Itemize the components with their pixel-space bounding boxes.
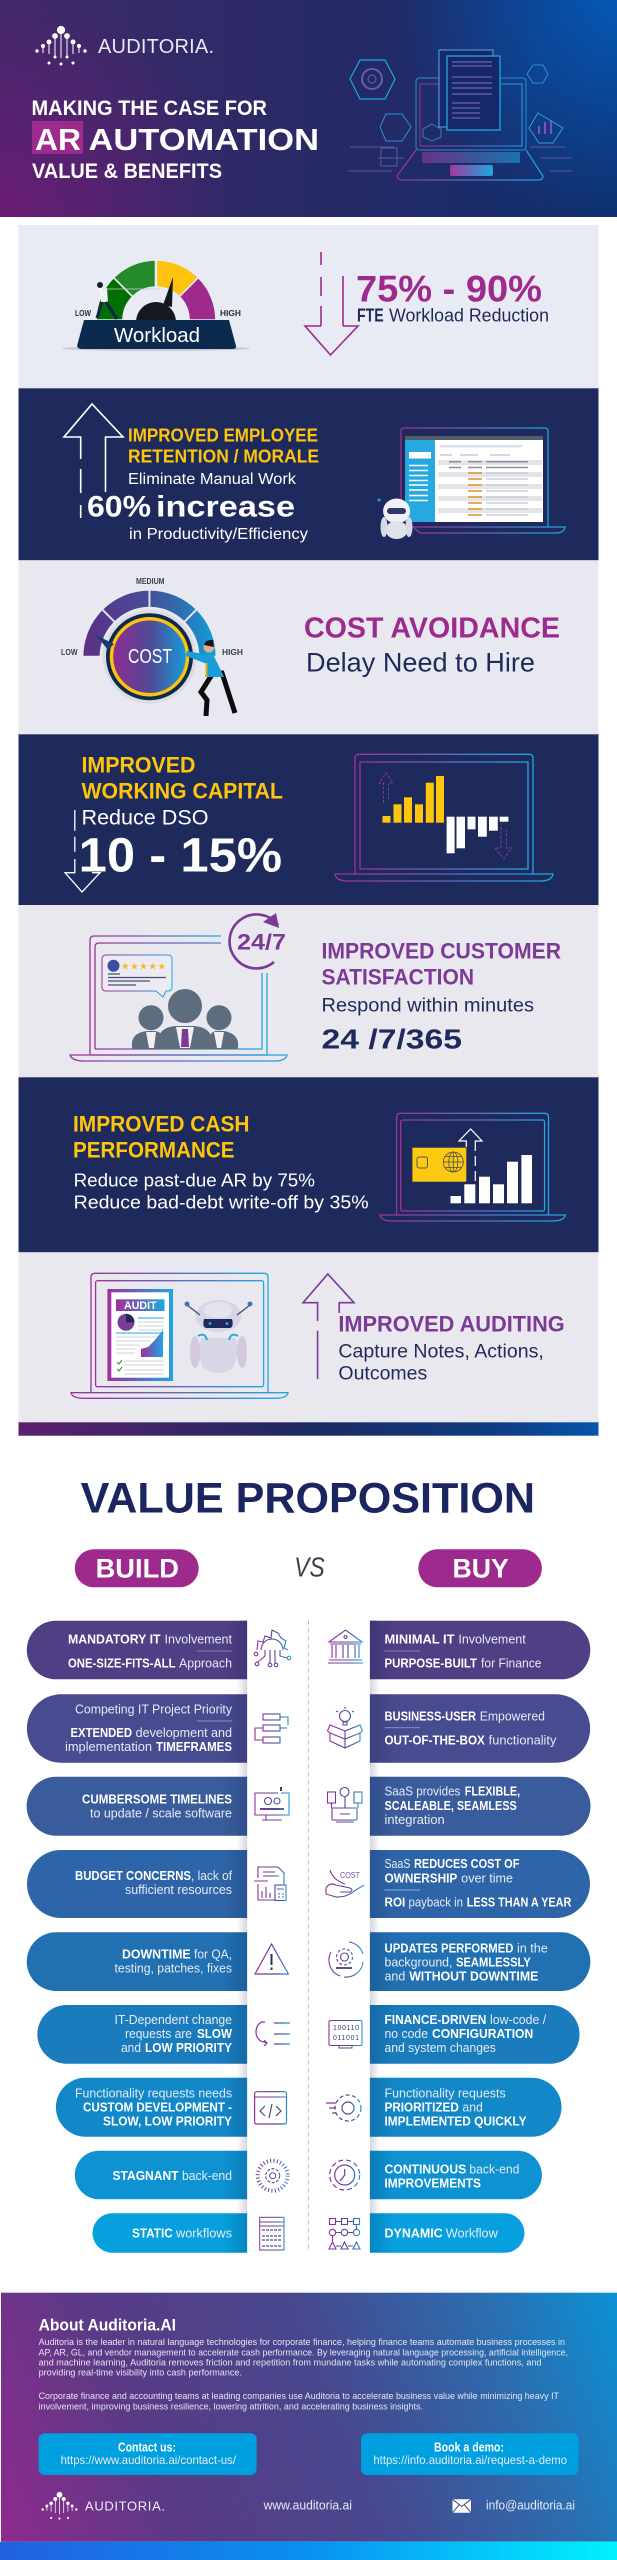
text block: cash performance: PERFORMANCE — [73, 1138, 234, 1163]
gauge: workload: LOW — [75, 309, 91, 318]
icon: hand with cost — [326, 1870, 364, 1897]
text block: retention: increase — [156, 491, 295, 524]
gauge: cost: HIGH — [222, 648, 243, 657]
text block: auditing: Outcomes — [338, 1363, 427, 1384]
row 4: buy: ROI — [384, 1895, 405, 1909]
row 6: build: SLOW — [197, 2027, 232, 2041]
row 4: build: , lack of — [191, 1869, 232, 1883]
metric: 75% - 90% — [356, 268, 549, 326]
row 7: buy: Functionality requests — [384, 2086, 506, 2100]
panel: working capital — [18, 734, 598, 905]
text block: retention — [87, 426, 319, 543]
text block: cost avoidance: Delay Need to Hire — [306, 648, 535, 678]
row 7: buy: PRIORITIZED — [384, 2100, 459, 2114]
gauge: workload: Workload — [114, 325, 200, 347]
row 4: build: sufficient resources — [125, 1883, 232, 1897]
row 5: build — [27, 1932, 247, 1991]
row 6: buy: and system changes — [384, 2041, 496, 2055]
icon: workflow shapes — [329, 2218, 360, 2249]
row 6: build — [37, 2005, 247, 2064]
button: contact us: https://www.auditoria.ai/contact-us/ — [61, 2453, 237, 2467]
clock 24/7: 24/7 — [237, 929, 286, 954]
row 7: build — [56, 2078, 247, 2137]
row 7: buy: and — [462, 2100, 483, 2114]
arrow: down — [305, 252, 358, 355]
row 3: buy: integration — [384, 1813, 445, 1827]
row 3: buy — [370, 1777, 590, 1836]
row 9: buy: Workflow — [446, 2226, 499, 2240]
row 1: build — [27, 1621, 247, 1679]
text block: cash performance: IMPROVED CASH — [73, 1112, 250, 1137]
row 2: buy — [370, 1694, 590, 1763]
about text: providing real-time visibility into cash performance. — [39, 2368, 242, 2379]
text block: auditing: IMPROVED AUDITING — [338, 1312, 565, 1337]
icon: gear burst — [258, 2161, 288, 2191]
row 1: buy — [370, 1621, 590, 1679]
row 9: build — [92, 2213, 247, 2253]
panel: workload reduction — [18, 225, 598, 388]
row 6: build: and — [121, 2041, 141, 2055]
gauge: cost: MEDIUM — [136, 577, 165, 586]
footer panel: about auditoria — [1, 2293, 617, 2542]
icon: binary monitor — [329, 2020, 362, 2048]
logo: Auditoria — [36, 26, 214, 65]
icon: binary monitor: 011001 — [333, 2035, 359, 2042]
row 6: build: IT-Dependent change — [114, 2013, 232, 2027]
row 8: build: back-end — [182, 2169, 232, 2183]
metric: 75% - 90%: 75% - 90% — [356, 268, 542, 310]
row 8: build: STAGNANT — [112, 2169, 179, 2183]
text block: working capital: WORKING CAPITAL — [82, 778, 283, 803]
text block: auditing — [338, 1312, 565, 1384]
button: contact us — [39, 2433, 257, 2475]
icon: document and calculator — [254, 1867, 286, 1900]
row 9: buy: DYNAMIC — [384, 2226, 443, 2240]
row 4: buy: over time — [461, 1871, 513, 1885]
row 4: buy — [370, 1850, 590, 1918]
button: contact us: Contact us: — [118, 2441, 176, 2455]
text block: customer satisfaction: IMPROVED CUSTOMER — [322, 938, 561, 963]
row 2: build: development and — [136, 1726, 232, 1740]
row 5: buy: and — [384, 1969, 405, 1983]
row 3: build — [27, 1777, 247, 1836]
panel: customer satisfaction — [18, 905, 598, 1077]
audit report: AUDIT — [124, 1300, 157, 1312]
row 5: build: testing, patches, fixes — [114, 1961, 232, 1975]
row 1: buy: PURPOSE-BUILT — [384, 1656, 477, 1670]
metric: 75% - 90%: FTE — [357, 306, 384, 326]
gauge: cost — [61, 577, 243, 716]
row 2: build: TIMEFRAMES — [156, 1740, 232, 1754]
row 4: build: BUDGET CONCERNS — [75, 1869, 191, 1883]
row 8: buy — [370, 2151, 542, 2199]
gauge: workload: HIGH — [220, 309, 241, 318]
row 1: buy: for Finance — [481, 1656, 542, 1670]
row 8: buy: IMPROVEMENTS — [384, 2177, 481, 2191]
figure pulling needle — [97, 282, 160, 319]
icon: fast gear — [326, 2095, 361, 2121]
arrow: up — [64, 404, 123, 518]
arrow: up — [303, 1274, 354, 1379]
row 2: build: implementation — [65, 1740, 152, 1754]
icon: box with bulb — [328, 1707, 362, 1748]
label: buy — [418, 1549, 542, 1587]
row 3: build: to update / scale software — [90, 1806, 232, 1820]
panel: cash performance — [18, 1077, 598, 1252]
text block: working capital: Reduce DSO — [82, 806, 208, 829]
text block: working capital — [79, 752, 283, 883]
row 8: buy: CONTINUOUS — [384, 2163, 466, 2177]
title: VALUE & BENEFITS — [32, 160, 222, 183]
row 5: buy: in the — [517, 1941, 548, 1955]
row 2: build — [27, 1694, 247, 1763]
row 1: buy: Involvement — [458, 1632, 526, 1646]
icon: flowchart — [255, 1714, 288, 1743]
row 6: buy — [370, 2005, 580, 2064]
icon: gear clock — [330, 2160, 360, 2190]
about text: involvement, improving business resilience, lowering attrition, and accelerating business insights. — [39, 2401, 423, 2412]
button: book a demo: Book a demo: — [434, 2441, 504, 2455]
heading: value proposition: VALUE PROPOSITION — [81, 1475, 535, 1523]
speech bubble with rating: ★★★★★ — [121, 962, 166, 972]
row 1: build: ONE-SIZE-FITS-ALL — [68, 1656, 176, 1670]
text block: auditing: Capture Notes, Actions, — [338, 1341, 544, 1362]
icon: bank — [328, 1630, 363, 1663]
about heading: About Auditoria.AI — [39, 2316, 176, 2335]
row 4: build — [27, 1850, 247, 1918]
text block: cash performance: Reduce past-due AR by 75% — [74, 1170, 315, 1191]
label: build — [75, 1549, 199, 1587]
text block: cost avoidance — [304, 612, 560, 678]
row 1: build: Approach — [179, 1656, 232, 1670]
icon: warning triangle — [255, 1944, 288, 1974]
row 5: buy — [370, 1932, 590, 1991]
icon: gear circuit — [254, 1630, 291, 1667]
panel: cost avoidance — [18, 560, 598, 734]
row 5: build: DOWNTIME — [122, 1947, 191, 1961]
text block: customer satisfaction: Respond within minutes — [322, 995, 534, 1017]
illustration: laptop with customers and 24/7 clock — [70, 913, 287, 1061]
text block: cash performance: Reduce bad-debt write-off by 35% — [74, 1191, 369, 1212]
about text — [39, 2337, 568, 2412]
audit report — [107, 1289, 173, 1381]
title: AR — [35, 122, 81, 157]
row 3: buy: SaaS provides — [384, 1785, 460, 1799]
row 9: build: STATIC — [132, 2226, 173, 2240]
metric: 75% - 90%: Workload Reduction — [389, 306, 549, 326]
text block: working capital: 10 - 15% — [79, 830, 282, 883]
website: www.auditoria.ai — [263, 2498, 352, 2512]
gauge: cost: COST — [128, 646, 172, 668]
gauge: workload — [62, 260, 250, 351]
row 7: build: CUSTOM DEVELOPMENT - — [83, 2100, 232, 2114]
icon: integration docs — [328, 1788, 362, 1822]
row 2: buy: OUT-OF-THE-BOX — [384, 1733, 485, 1747]
text block: customer satisfaction — [322, 938, 561, 1054]
icon: update cycle gear — [329, 1942, 363, 1977]
row 8: build — [75, 2151, 247, 2199]
row 2: build: Competing IT Project Priority — [75, 1702, 233, 1716]
row 9: build: workflows — [175, 2226, 232, 2240]
email: info@auditoria.ai — [486, 2498, 575, 2512]
text block: working capital: IMPROVED — [82, 752, 196, 777]
illustration: laptop with documents — [348, 50, 572, 180]
row 2: buy: Empowered — [480, 1709, 545, 1723]
row 7: build: Functionality requests needs — [75, 2086, 232, 2100]
icon: process list — [256, 2022, 290, 2046]
row 4: buy: OWNERSHIP — [384, 1871, 457, 1885]
illustration: laptop with bar chart — [335, 754, 553, 881]
row 9: buy — [370, 2213, 524, 2253]
row 3: build: CUMBERSOME TIMELINES — [82, 1792, 232, 1806]
text block: retention: in Productivity/Efficiency — [129, 526, 308, 543]
icon: monitor with gears — [255, 1787, 289, 1820]
row 5: buy: background, — [384, 1955, 452, 1969]
title: AUTOMATION — [88, 122, 319, 157]
row 4: buy: SaaS — [384, 1857, 410, 1871]
button: book a demo: https://info.auditoria.ai/request-a-demo — [373, 2453, 567, 2467]
robot — [378, 498, 412, 539]
button: book a demo — [361, 2433, 578, 2475]
about text: Corporate finance and accounting teams at leading companies use Auditoria to accelerate business value while minimizing heavy IT — [39, 2391, 559, 2402]
row 5: buy: UPDATES PERFORMED — [384, 1941, 514, 1955]
illustration: laptop with audit report and robot — [71, 1273, 288, 1398]
row 2: buy: functionality — [489, 1733, 557, 1747]
text block: customer satisfaction: SATISFACTION — [322, 964, 474, 989]
header banner — [0, 0, 617, 217]
row 1: buy: MINIMAL IT — [384, 1632, 455, 1646]
logo: Auditoria footer: AUDITORIA. — [85, 2499, 165, 2514]
text block: retention: Eliminate Manual Work — [128, 471, 297, 488]
text block: retention: 60% — [87, 491, 151, 524]
illustration: laptop with inbox and robot — [378, 428, 565, 539]
row 1: build: Involvement — [164, 1632, 233, 1646]
customers — [132, 989, 238, 1049]
about text: Auditoria is the leader in natural language technologies for corporate finance, helping finance teams automate business processes in — [39, 2337, 565, 2348]
row 3: buy: FLEXIBLE, — [465, 1785, 520, 1799]
row 5: build: for QA, — [194, 1947, 232, 1961]
figure pushing dial — [186, 640, 235, 716]
row 7: buy: IMPLEMENTED QUICKLY — [384, 2114, 527, 2128]
about text: AP, AR, GL, and vendor management to accelerate cash performance. By leveraging natural language processing, artificial intelligence, — [39, 2347, 568, 2358]
clock 24/7 — [230, 913, 286, 968]
row 4: buy: REDUCES COST OF — [414, 1857, 520, 1871]
row 6: buy: FINANCE-DRIVEN — [384, 2013, 486, 2027]
label: vs: VS — [294, 1552, 325, 1583]
speech bubble with rating — [102, 955, 172, 997]
icon: table document — [260, 2217, 284, 2250]
row 1: build: MANDATORY IT — [68, 1632, 161, 1646]
logo: Auditoria: AUDITORIA. — [98, 36, 214, 58]
row 6: buy: CONFIGURATION — [432, 2027, 533, 2041]
robot — [184, 1300, 252, 1373]
row 7: build: SLOW, LOW PRIORITY — [103, 2114, 233, 2128]
panel: employee retention — [18, 388, 598, 560]
row 6: build: LOW PRIORITY — [145, 2041, 233, 2055]
icon: binary monitor: 100110 — [333, 2025, 359, 2032]
text block: cost avoidance: COST AVOIDANCE — [304, 612, 560, 644]
row 7: buy — [370, 2078, 562, 2137]
arrow: down — [65, 810, 100, 892]
row 6: buy: no code — [384, 2027, 428, 2041]
text block: retention: IMPROVED EMPLOYEE — [128, 426, 318, 446]
gauge: cost: LOW — [61, 648, 78, 657]
about text: and machine learning, Auditoria removes friction and repetition from mundane tasks while automating complex functions, and — [39, 2357, 541, 2368]
row 2: build: EXTENDED — [70, 1726, 132, 1740]
logo: Auditoria footer — [42, 2492, 165, 2519]
row 2: buy: BUSINESS-USER — [384, 1709, 476, 1723]
row 5: buy: SEAMLESSLY — [456, 1955, 531, 1969]
row 4: buy: LESS THAN A YEAR — [467, 1895, 571, 1909]
row 5: buy: WITHOUT DOWNTIME — [409, 1969, 538, 1983]
panel: auditing — [18, 1252, 598, 1422]
row 6: build: requests are — [125, 2027, 192, 2041]
row 4: buy: payback in — [408, 1895, 463, 1909]
row 8: buy: back-end — [469, 2163, 519, 2177]
row 6: buy: low-code / — [490, 2013, 547, 2027]
title — [32, 97, 319, 183]
illustration: laptop with card and chart — [380, 1113, 566, 1221]
label: build: BUILD — [96, 1554, 179, 1584]
row 3: buy: SCALEABLE, SEAMLESS — [384, 1799, 517, 1813]
label: buy: BUY — [452, 1554, 509, 1584]
title: MAKING THE CASE FOR — [32, 97, 267, 120]
text block: customer satisfaction: 24 /7/365 — [322, 1023, 462, 1054]
icon: code window — [255, 2092, 286, 2124]
text block: retention: RETENTION / MORALE — [128, 447, 319, 467]
icon: envelope — [452, 2499, 471, 2513]
icon: hand with cost: COST — [340, 1870, 360, 1880]
text block: cash performance — [73, 1112, 369, 1212]
